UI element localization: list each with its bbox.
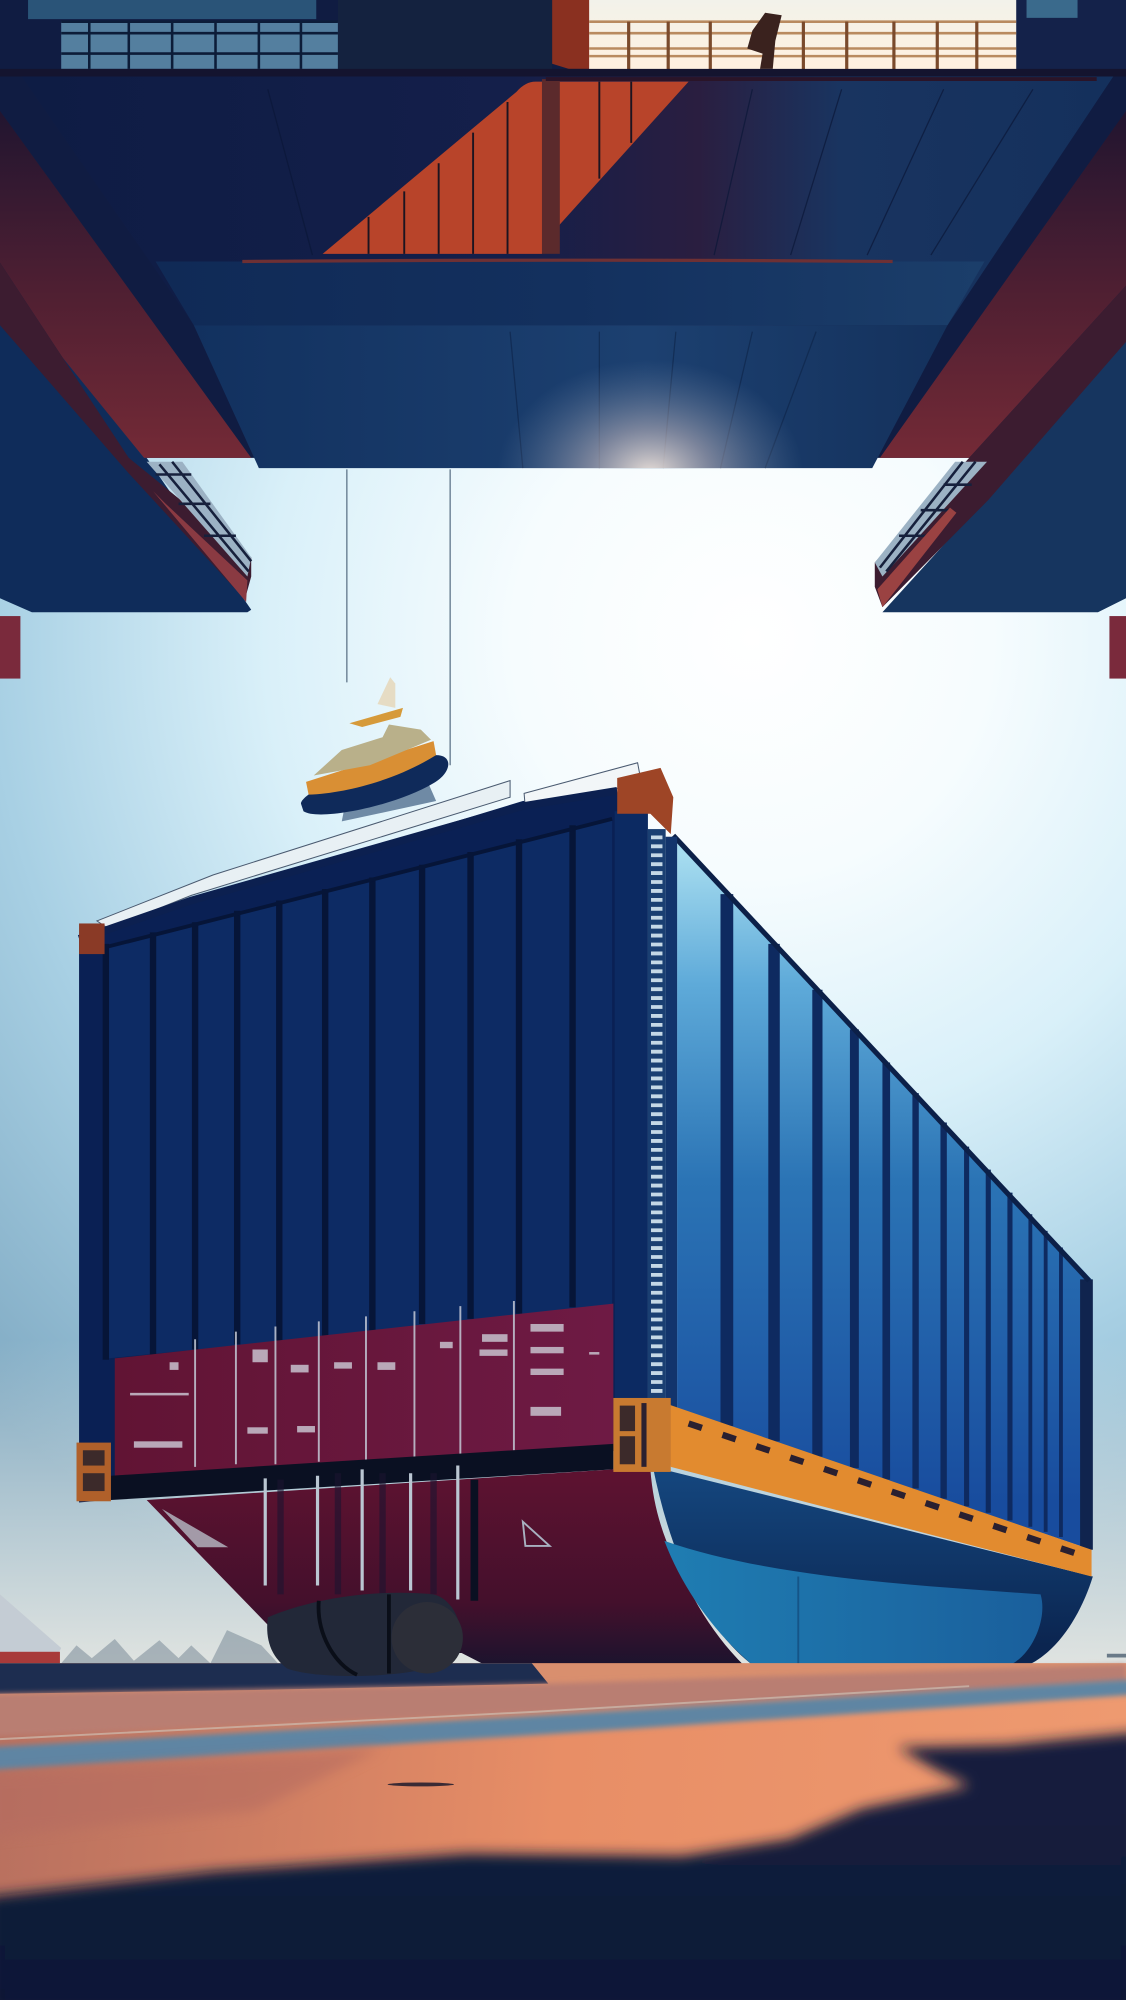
left hanging bracket — [0, 616, 20, 679]
shadow on dock — [0, 1732, 1126, 2000]
distant port skyline — [0, 1594, 1126, 1663]
red column — [552, 0, 594, 69]
muted left dock patch — [0, 1747, 383, 1837]
mid crane beam — [156, 261, 984, 325]
corner castings — [617, 768, 673, 834]
orange deck stripe — [664, 1403, 1092, 1577]
left red crane wall — [0, 111, 251, 458]
dark base band — [111, 1444, 613, 1500]
top railing right window with figure — [589, 0, 1016, 70]
hull struts — [265, 1466, 474, 1601]
right crane leg — [875, 286, 1126, 612]
lower crane beam with sun glow — [194, 325, 948, 468]
gantry crane overhead structure — [0, 0, 1126, 679]
end post and patterned strip — [615, 811, 648, 1403]
propeller pod — [267, 1593, 463, 1676]
dock ground — [0, 1663, 1126, 2000]
front face of container stack — [77, 763, 677, 1503]
left bottom bracket — [77, 1443, 111, 1501]
side of container stack — [673, 835, 1093, 1550]
ship hull — [147, 1398, 1093, 1681]
right red crane wall — [880, 111, 1126, 458]
red sunlit panel on the crane — [323, 79, 1097, 254]
container markings — [130, 1324, 599, 1448]
far dock strip — [0, 1663, 1126, 1709]
ship bridge tower — [301, 677, 448, 821]
left crane leg — [0, 263, 251, 612]
orange bracket — [613, 1398, 671, 1472]
maroon container panels — [115, 1304, 613, 1476]
upper deck panel — [22, 77, 1113, 325]
right hanging bracket — [1109, 616, 1126, 679]
dark centre of top band — [338, 0, 552, 71]
right corner of top band — [1016, 0, 1126, 77]
hull markers — [162, 1509, 228, 1547]
crane cables — [347, 469, 450, 765]
roof railing strips — [97, 781, 510, 929]
top railing left window — [28, 0, 338, 69]
blue stripe — [0, 1679, 1126, 1770]
oil spot on dock — [388, 1783, 454, 1786]
